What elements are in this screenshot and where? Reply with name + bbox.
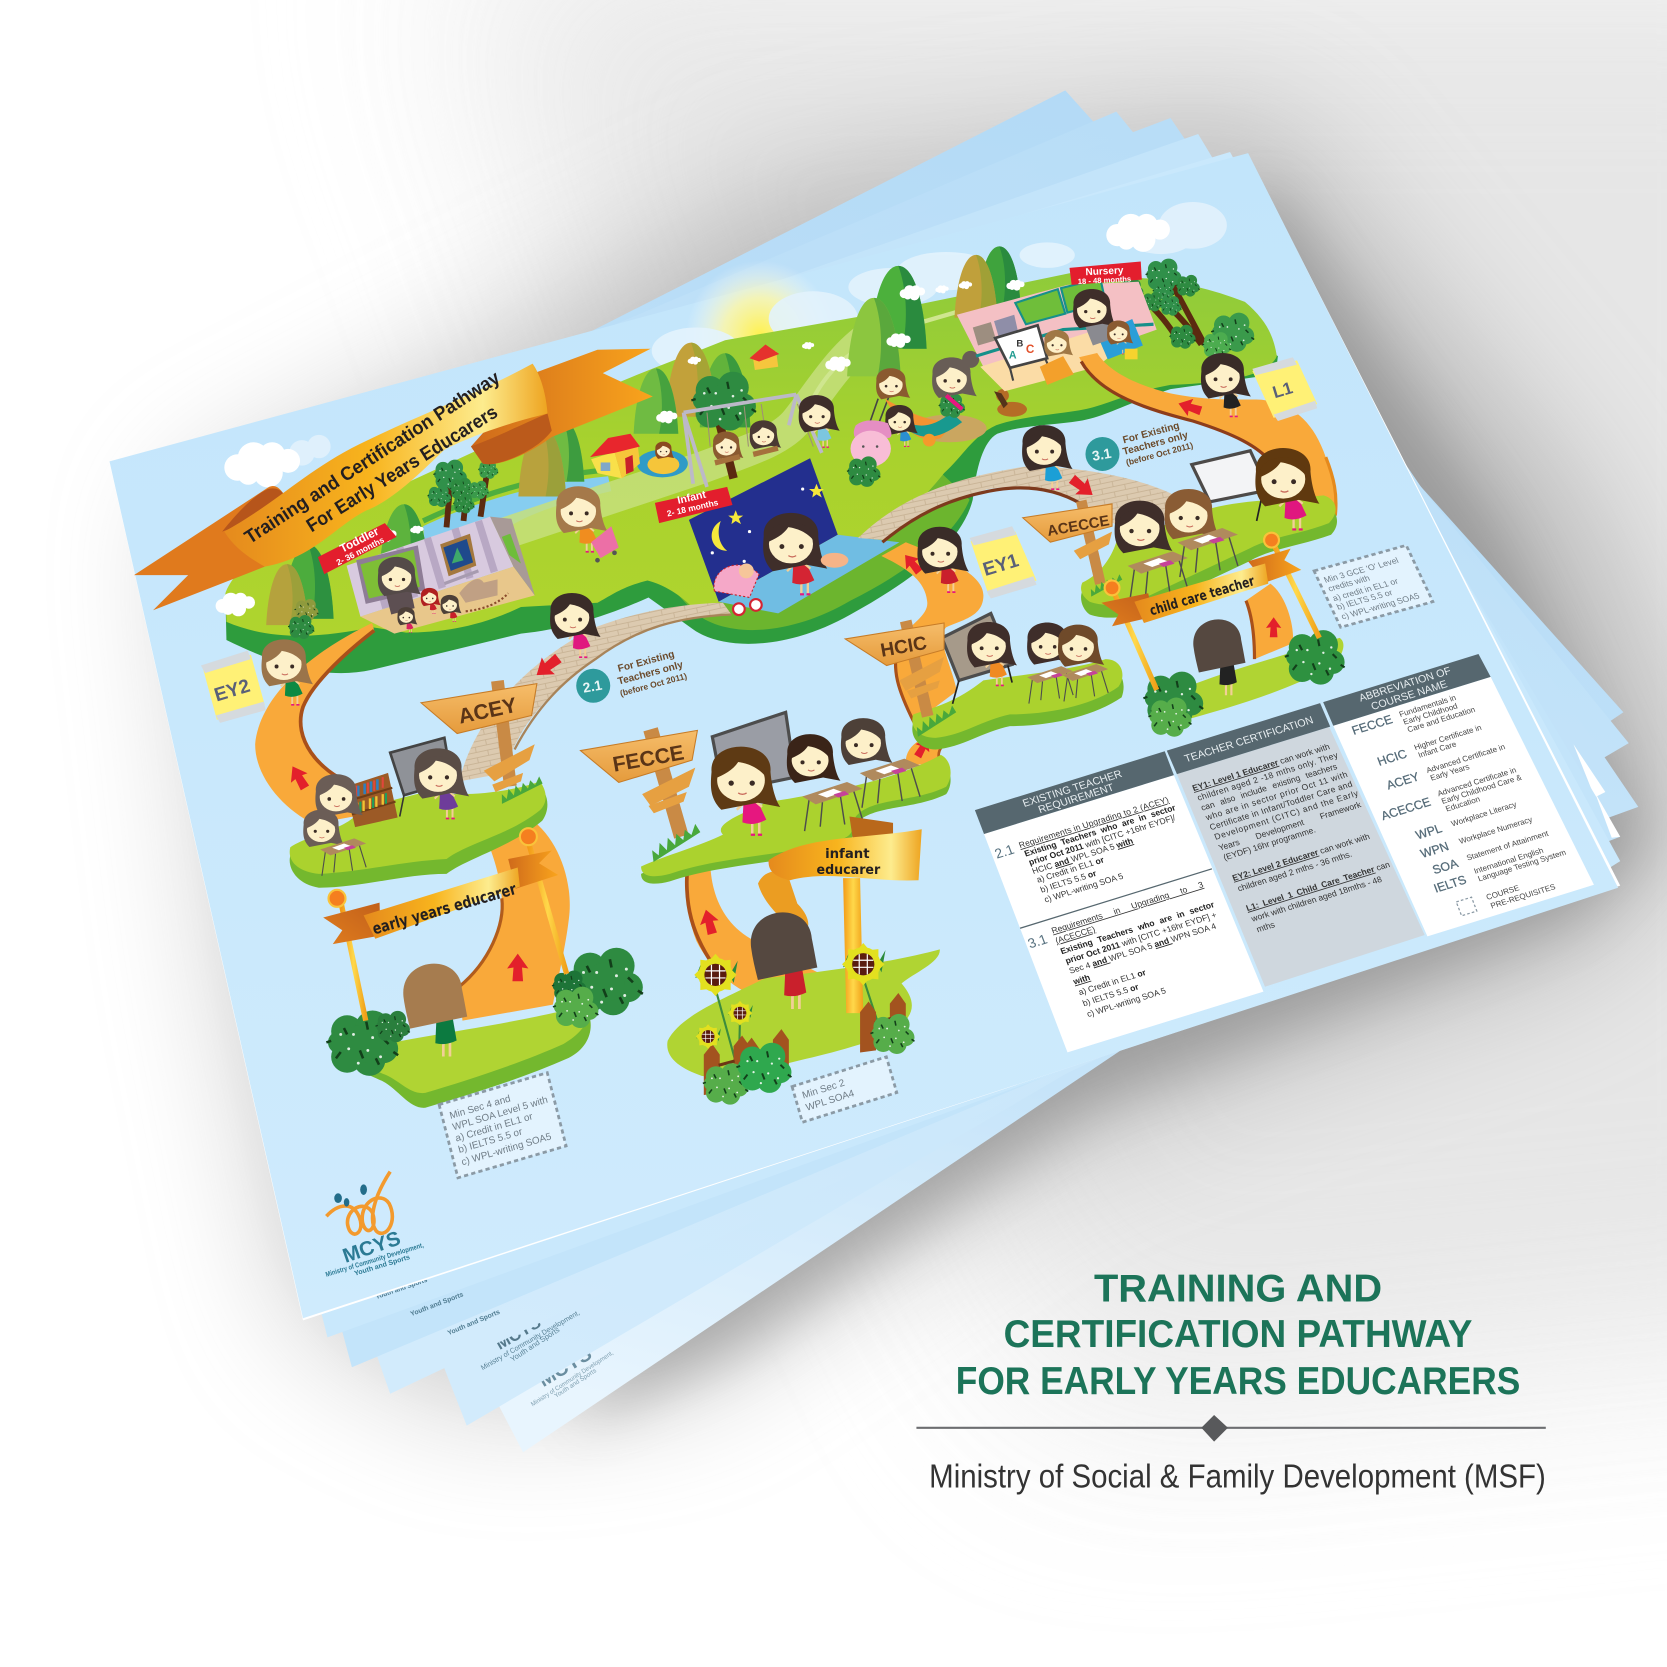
column: abbreviation of course name: WPL xyxy=(1414,821,1444,842)
column: existing teacher requirement xyxy=(975,749,1263,1052)
sign ACEY xyxy=(421,680,545,804)
icon: farm house xyxy=(750,344,779,370)
requirement box: child care: c) WPL-writing SOA5 xyxy=(1339,591,1421,621)
note EY2 xyxy=(201,651,266,723)
column: abbreviation of course name: ABBREVIATION OF xyxy=(1357,665,1453,704)
label: Infant: Infant xyxy=(676,489,708,507)
playground children, slide and toys xyxy=(799,351,987,487)
whiteboard ABC: B xyxy=(1016,339,1023,350)
back sheet 5: Youth and Sports xyxy=(553,1367,598,1400)
column: abbreviation of course name: Early Childhood xyxy=(1402,702,1459,727)
blackboard HCIC xyxy=(942,613,1012,680)
arch bridge 2.1 xyxy=(459,603,731,781)
column: teacher certification: work with children aged 18mths - 48 xyxy=(1249,874,1384,924)
column: existing teacher requirement: c) WPL-writing SOA 5 xyxy=(1043,871,1125,904)
banner child care teacher xyxy=(1101,533,1319,690)
column: existing teacher requirement: b) IELTS 5.5 or xyxy=(1039,868,1098,895)
column: abbreviation of course name: IELTS xyxy=(1432,873,1468,896)
label: Infant xyxy=(655,487,733,523)
red arrow on bridge 3.1 xyxy=(1066,471,1099,503)
back sheet 4: Ministry of Community Development, xyxy=(479,1308,581,1372)
column: abbreviation of course name: PRE-REQUISITES xyxy=(1489,882,1557,911)
requirement box: early years xyxy=(439,1073,566,1178)
sunflowers, fences and bushes xyxy=(694,943,914,1105)
back sheet 4: MCYS xyxy=(492,1313,544,1354)
note for existing teachers 2.1: (before Oct 2011) xyxy=(619,671,688,698)
requirement box: child care: credits with xyxy=(1326,573,1372,593)
island ACECCE xyxy=(1081,448,1337,618)
island HCIC xyxy=(912,613,1124,750)
subtitle: ministry: Ministry of Social & Family Development (MSF) xyxy=(929,1457,1546,1494)
back sheet 5: Ministry of Community Development, xyxy=(530,1350,615,1408)
badge 3.1: 3.1 xyxy=(1091,445,1113,464)
column: abbreviation of course name: Language Testing System xyxy=(1477,848,1568,883)
banner child care teacher: child care teacher xyxy=(1148,573,1257,619)
red arrow on bridge 2.1 xyxy=(530,650,565,683)
requirement box: early years: Min Sec 4 and xyxy=(448,1093,512,1122)
note L1 xyxy=(1252,357,1317,421)
banner infant educarer: educarer xyxy=(816,863,881,878)
banner infant educarer: infant xyxy=(825,847,870,862)
title ribbon xyxy=(134,349,653,610)
column: abbreviation of course name: ACECCE xyxy=(1379,795,1433,823)
column: existing teacher requirement: HCIC and WPL SOA 5 with xyxy=(1031,836,1134,876)
banner infant educarer xyxy=(758,816,922,1013)
road early years xyxy=(459,815,570,1021)
column: teacher certification: Development (CITC) and the Early xyxy=(1213,788,1360,842)
MCYS logo xyxy=(325,1172,425,1279)
back sheet 3: Youth and Sports xyxy=(447,1309,501,1337)
label: Nursery: 18 - 48 months xyxy=(1078,274,1131,286)
column: existing teacher requirement: a) Credit in EL1 or xyxy=(1077,967,1148,997)
note EY2: EY2 xyxy=(212,676,253,706)
blackboard FECCE xyxy=(712,712,795,792)
requirement box: infant xyxy=(792,1057,897,1122)
note for existing teachers 2.1: For Existing xyxy=(617,649,676,675)
label: Nursery: Nursery xyxy=(1085,265,1124,278)
note for existing teachers 3.1: Teachers only xyxy=(1122,430,1190,458)
back sheet 5 xyxy=(357,90,1623,1452)
mother with stroller xyxy=(556,486,619,563)
column: abbreviation of course name xyxy=(1323,646,1594,940)
badge 2.1 xyxy=(576,669,610,703)
note EY1 xyxy=(970,526,1037,599)
column: teacher certification: mths xyxy=(1255,919,1276,934)
note EY1: EY1 xyxy=(981,550,1022,581)
icon: leafy trees top right xyxy=(1119,259,1254,358)
swing set xyxy=(684,372,822,487)
column: existing teacher requirement: Sec 4 and WPL SOA 5 and WPN SOA 4 xyxy=(1068,921,1218,976)
poster: top sheet xyxy=(110,153,1620,1320)
column: existing teacher requirement: EXISTING TEACHER xyxy=(1021,768,1124,810)
column: abbreviation of course name: International English xyxy=(1473,846,1545,876)
column: teacher certification: TEACHER CERTIFICATION xyxy=(1183,714,1315,765)
requirement box: infant: WPL SOA4 xyxy=(805,1088,856,1114)
child seen from behind, infant island xyxy=(751,912,817,1009)
column: abbreviation of course name: WPN xyxy=(1419,839,1451,861)
back sheet 2 xyxy=(266,134,1620,1367)
blackboard xyxy=(390,738,452,816)
poster stack: back sheets xyxy=(248,90,1638,1452)
girl on bridge 3.1 xyxy=(1022,425,1073,490)
ribbon title text: For Early Years Educarers xyxy=(303,402,502,537)
column: abbreviation of course name: Early Childhood Care & xyxy=(1440,773,1524,806)
sign HCIC: HCIC xyxy=(879,633,929,662)
small clouds over land xyxy=(216,280,1025,616)
girl L1 on road xyxy=(1201,353,1251,417)
column: abbreviation of course name: SOA xyxy=(1430,856,1461,877)
divider with diamond xyxy=(916,1415,1546,1442)
column: abbreviation of course name: HCIC xyxy=(1375,747,1409,769)
requirement box: child care: Min 3 GCE 'O' Level xyxy=(1322,555,1400,585)
MCYS logo: Ministry of Community Development, xyxy=(325,1242,425,1279)
note for existing teachers 3.1: (before Oct 2011) xyxy=(1125,440,1194,468)
note L1: L1 xyxy=(1270,378,1295,402)
bookcase xyxy=(346,773,398,827)
requirement box: child care: a) credit in EL1 or xyxy=(1331,576,1400,603)
column: teacher certification: EY1: Level 1 Educarer can work with xyxy=(1191,741,1331,793)
column: existing teacher requirement: Existing Teachers who are in sector xyxy=(1023,802,1178,858)
column: existing teacher requirement: (ACECCE) xyxy=(1054,924,1097,945)
label: Toddler: Toddler xyxy=(338,525,382,556)
column: existing teacher requirement: Requirements in Upgrading to 3 xyxy=(1050,879,1205,936)
label: Toddler: 2- 36 months xyxy=(334,535,386,567)
nursery classroom xyxy=(957,279,1157,391)
road FECCE xyxy=(687,859,821,999)
back sheet 5: MCYS xyxy=(535,1343,596,1392)
whiteboard ACECCE xyxy=(1192,451,1268,502)
column: abbreviation of course name: Care and Education xyxy=(1406,705,1477,734)
girl EY1 on road xyxy=(917,527,969,593)
column: abbreviation of course name: Advanced Certificate in xyxy=(1425,742,1506,775)
cloud top left xyxy=(224,435,331,487)
road EY1 xyxy=(881,542,983,723)
banner early years educarer xyxy=(323,828,567,1021)
sign FECCE: FECCE xyxy=(611,740,686,777)
column: abbreviation of course name: Early Years xyxy=(1429,762,1471,783)
heading: training and certification pathway: CERTIFICATION PATHWAY xyxy=(1004,1312,1472,1356)
column: existing teacher requirement: b) IELTS 5.5 or xyxy=(1081,981,1141,1008)
column: existing teacher requirement: REQUIREMENT xyxy=(1037,782,1116,816)
MCYS logo: Youth and Sports xyxy=(354,1254,411,1278)
column: abbreviation of course name: FECCE xyxy=(1350,712,1394,738)
heading: training and certification pathway: FOR EARLY YEARS EDUCARERS xyxy=(956,1359,1520,1403)
whiteboard ABC: A xyxy=(1009,349,1017,361)
column: teacher certification: (EYDF) 16hr programme. xyxy=(1222,825,1317,862)
label: Infant: 2- 18 months xyxy=(666,497,719,519)
sign HCIC xyxy=(845,620,960,737)
road EY2 xyxy=(255,623,388,824)
heading: training and certification pathway: TRAINING AND xyxy=(1094,1266,1382,1310)
note for existing teachers 3.1 xyxy=(1122,421,1194,468)
label: Toddler xyxy=(318,523,397,574)
island FECCE xyxy=(641,712,951,884)
sign FECCE xyxy=(580,727,705,862)
road L1 xyxy=(1079,353,1336,516)
note for existing teachers 3.1: For Existing xyxy=(1122,421,1181,446)
badge 3.1 xyxy=(1085,437,1119,471)
column: existing teacher requirement: Requirements in Upgrading to 2 (ACEY) xyxy=(1017,795,1170,850)
column: abbreviation of course name: Education xyxy=(1444,795,1481,813)
requirement box: early years: c) WPL-writing SOA5 xyxy=(460,1131,553,1168)
note for existing teachers 2.1 xyxy=(617,649,688,698)
back sheet 2: Youth and Sports xyxy=(410,1291,465,1318)
requirement box: infant: Min Sec 2 xyxy=(801,1078,846,1101)
requirement box: early years: b) IELTS 5.5 or xyxy=(457,1126,524,1156)
sign ACECCE xyxy=(1023,500,1124,597)
infant room xyxy=(689,458,899,615)
requirement box: early years: WPL SOA Level 5 with xyxy=(451,1095,549,1133)
cloud top right xyxy=(1106,202,1227,254)
column: abbreviation of course name: COURSE NAME xyxy=(1369,678,1449,713)
girl on bridge 2.1 xyxy=(550,593,601,658)
MCYS logo: MCYS xyxy=(340,1228,403,1268)
back sheet 4: Youth and Sports xyxy=(509,1325,561,1364)
requirement box: early years: a) Credit in EL1 or xyxy=(454,1111,535,1145)
column: abbreviation of course name: COURSE xyxy=(1485,883,1521,902)
column: teacher certification: children aged 2 -18 mths only. They xyxy=(1196,750,1340,803)
column: teacher certification: Certificate in Infant/Toddler Care and xyxy=(1208,779,1354,832)
main green land xyxy=(225,273,1278,673)
column: existing teacher requirement: 3.1 xyxy=(1025,931,1049,951)
requirement box: child care xyxy=(1314,545,1433,627)
table panel xyxy=(975,646,1595,1052)
column: abbreviation of course name: Fundamentals in xyxy=(1398,693,1457,719)
ribbon title text: Training and Certification Pathway xyxy=(241,367,504,549)
pond and garden path xyxy=(423,310,962,553)
small house and pool xyxy=(590,434,688,478)
sign ACECCE: ACECCE xyxy=(1046,513,1111,540)
island ACEY xyxy=(290,738,547,888)
whiteboard ABC: C xyxy=(1026,343,1035,356)
column: abbreviation of course name: Advanced Certificate in xyxy=(1436,766,1518,798)
pale sky clouds and sun xyxy=(652,242,1075,409)
road child care xyxy=(1246,584,1293,659)
column: teacher certification xyxy=(1167,699,1425,989)
heading: training and certification pathway xyxy=(956,1266,1520,1403)
column: teacher certification: EY2: Level 2 Educarer can work with xyxy=(1231,831,1371,883)
whiteboard ABC xyxy=(995,325,1049,381)
icon: dog xyxy=(994,389,1027,417)
road HCIC lower xyxy=(906,731,962,765)
label: Nursery xyxy=(1070,262,1142,286)
island child care xyxy=(1143,619,1345,737)
requirement box: child care: b) IELTS 5.5 or xyxy=(1335,587,1394,612)
banner early years educarer: early years educarer xyxy=(370,879,519,938)
column: abbreviation of course name: Workplace Literacy xyxy=(1450,800,1518,828)
sign ACEY: ACEY xyxy=(456,693,519,729)
column: teacher certification: can also include existing teachers xyxy=(1199,761,1339,813)
teacher in toddler room xyxy=(378,557,421,614)
column: existing teacher requirement: a) Credit in EL1 or xyxy=(1035,854,1106,885)
note for existing teachers 2.1: Teachers only xyxy=(617,659,685,688)
toddler classroom xyxy=(347,517,535,634)
column: teacher certification: Years Development Framework xyxy=(1217,799,1363,853)
arch bridge 3.1 xyxy=(858,467,1201,542)
icon: leafy trees behind toddler room xyxy=(288,460,498,639)
column: teacher certification: L1: Level 1 Child Care Teacher can xyxy=(1245,859,1392,913)
column: existing teacher requirement: prior Oct 2011 with [CITC +16hr EYDF] + xyxy=(1064,910,1218,966)
back sheet 3 xyxy=(279,118,1638,1394)
badge 2.1: 2.1 xyxy=(582,677,604,696)
toddlers xyxy=(397,588,462,633)
column: abbreviation of course name: Statement of Attainment xyxy=(1465,829,1550,862)
back sheet 1: Youth and Sports xyxy=(375,1277,429,1301)
column: existing teacher requirement: c) WPL-writing SOA 5 xyxy=(1085,985,1168,1019)
column: existing teacher requirement: prior Oct 2011 with [CITC +16hr EYDF]/ xyxy=(1027,812,1177,867)
girl EY2 on road xyxy=(262,639,313,706)
column: teacher certification: children aged 2 mths - 36 mths. xyxy=(1236,849,1353,893)
cone trees xyxy=(266,246,1021,625)
column: existing teacher requirement: with xyxy=(1071,972,1092,987)
column: abbreviation of course name: ACEY xyxy=(1384,770,1421,792)
island early years xyxy=(326,948,643,1108)
column: abbreviation of course name: Infant Care xyxy=(1417,739,1458,760)
column: existing teacher requirement: Existing Teachers who are in sector xyxy=(1059,899,1216,956)
column: abbreviation of course name: Higher Certificate in xyxy=(1413,723,1483,752)
island infant xyxy=(667,949,940,1078)
column: abbreviation of course name: Workplace Numeracy xyxy=(1458,815,1534,846)
column: existing teacher requirement: 2.1 xyxy=(992,841,1016,862)
back sheet 4 xyxy=(342,112,1629,1426)
column: teacher certification: who are in sector prior Oct 11 with xyxy=(1203,769,1349,823)
